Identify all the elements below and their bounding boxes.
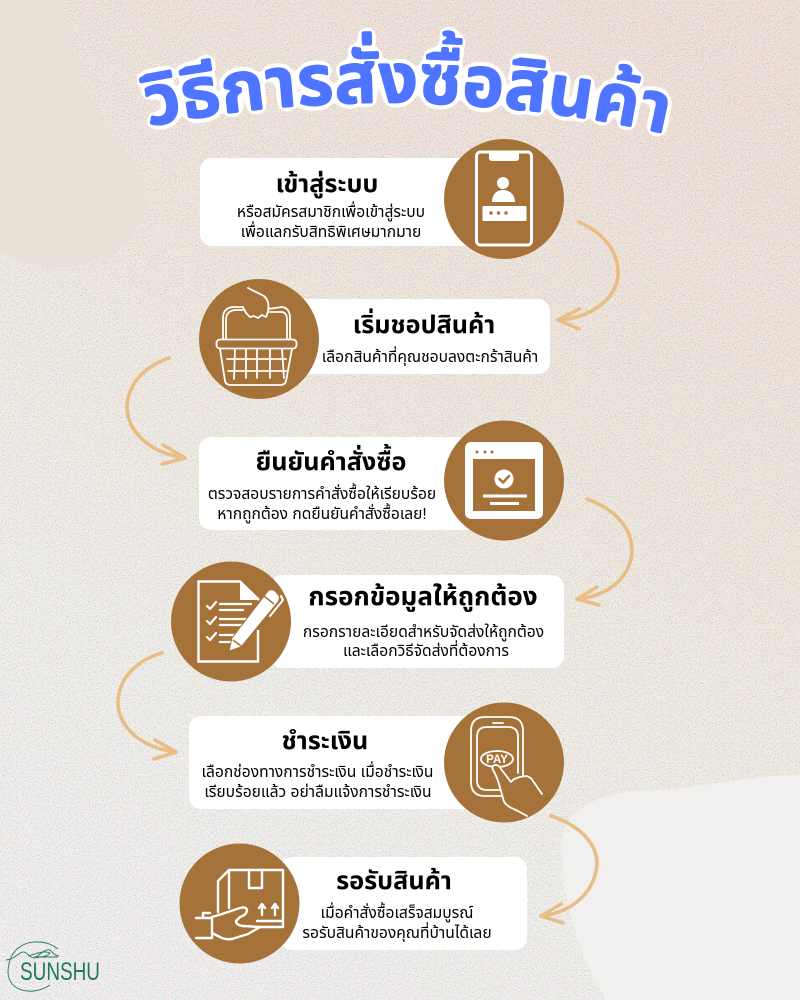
text: wait for delivery description: รอรับสินค้าของคุณที่บ้านได้เลย	[302, 922, 492, 942]
text: fill in details description: และเลือกวิธีจัดส่งที่ต้องการ	[343, 640, 509, 660]
step 6: wait for delivery	[180, 844, 527, 964]
text: fill in details description: กรอกรายละเอียดสำหรับจัดส่งให้ถูกต้อง	[303, 623, 544, 641]
arrow: step 4 to 5	[118, 653, 176, 759]
text: confirm order description: ตรวจสอบรายการคำสั่งซื้อให้เรียบร้อย	[208, 483, 436, 503]
blob: top left	[0, 0, 147, 267]
icon: form with pencil	[171, 562, 291, 682]
panel: start shopping	[280, 299, 550, 374]
step 4: fill in details	[171, 562, 564, 682]
text: sign in description: เพื่อแลกรับสิทธิพิเศษมากมาย	[241, 221, 421, 241]
arrow: step 5 to 6	[541, 816, 597, 923]
text: sign in description	[237, 201, 425, 241]
label: PAY: PAY	[486, 754, 508, 766]
panel: confirm order	[199, 437, 499, 530]
title: วิธีการสั่งซื้อสินค้า	[136, 26, 672, 137]
step 1: sign in	[200, 139, 564, 259]
heading: sign in: เข้าสู่ระบบ	[276, 170, 378, 199]
icon: box in hand	[180, 844, 300, 964]
panel: fill in details	[270, 575, 564, 668]
logo wordmark: SUNSHU	[20, 958, 100, 986]
panel: payment	[189, 716, 489, 809]
text: confirm order description: หากถูกต้อง กดยืนยันคำสั่งซื้อเลย!	[217, 503, 427, 523]
text: sign in description: หรือสมัครสมาชิกเพื่อเข้าสู่ระบบ	[237, 201, 425, 221]
blob: bottom right	[562, 775, 800, 1000]
logo: SUNSHU	[6, 942, 100, 991]
step 2: start shopping	[199, 279, 550, 399]
panel: sign in	[200, 158, 490, 246]
text: payment description: เลือกช่องทางการชำระเงิน เมื่อชำระเงิน	[202, 761, 433, 781]
arrow: step 1 to 2	[558, 222, 618, 329]
text: wait for delivery description: เมื่อคำสั่งซื้อเสร็จสมบูรณ์	[321, 902, 473, 922]
text: start shopping description: เลือกสินค้าที่คุณชอบลงตะกร้าสินค้า	[322, 346, 538, 366]
icon: phone login	[444, 139, 564, 259]
text: payment description: เรียบร้อยแล้ว อย่าลืมแจ้งการชำระเงิน	[204, 783, 432, 801]
heading: start shopping: เริ่มชอปสินค้า	[353, 307, 495, 339]
heading: confirm order: ยืนยันคำสั่งซื้อ	[256, 443, 406, 476]
step 3: confirm order	[199, 420, 564, 540]
heading: wait for delivery: รอรับสินค้า	[336, 867, 452, 895]
heading: payment: ชำระเงิน	[282, 727, 368, 755]
text: payment description	[202, 761, 433, 801]
icon: browser window with check	[444, 420, 564, 540]
arrow: step 3 to 4	[577, 499, 632, 605]
step 5: payment	[189, 702, 564, 822]
text: confirm order description	[208, 483, 436, 523]
icon: basket	[199, 279, 319, 399]
arrow: step 2 to 3	[127, 358, 185, 464]
icon: pay on phone	[444, 702, 564, 822]
text: fill in details description	[303, 623, 544, 660]
panel: wait for delivery	[280, 857, 527, 950]
text: wait for delivery description	[302, 902, 492, 942]
heading: fill in details: กรอกข้อมูลให้ถูกต้อง	[308, 581, 538, 612]
